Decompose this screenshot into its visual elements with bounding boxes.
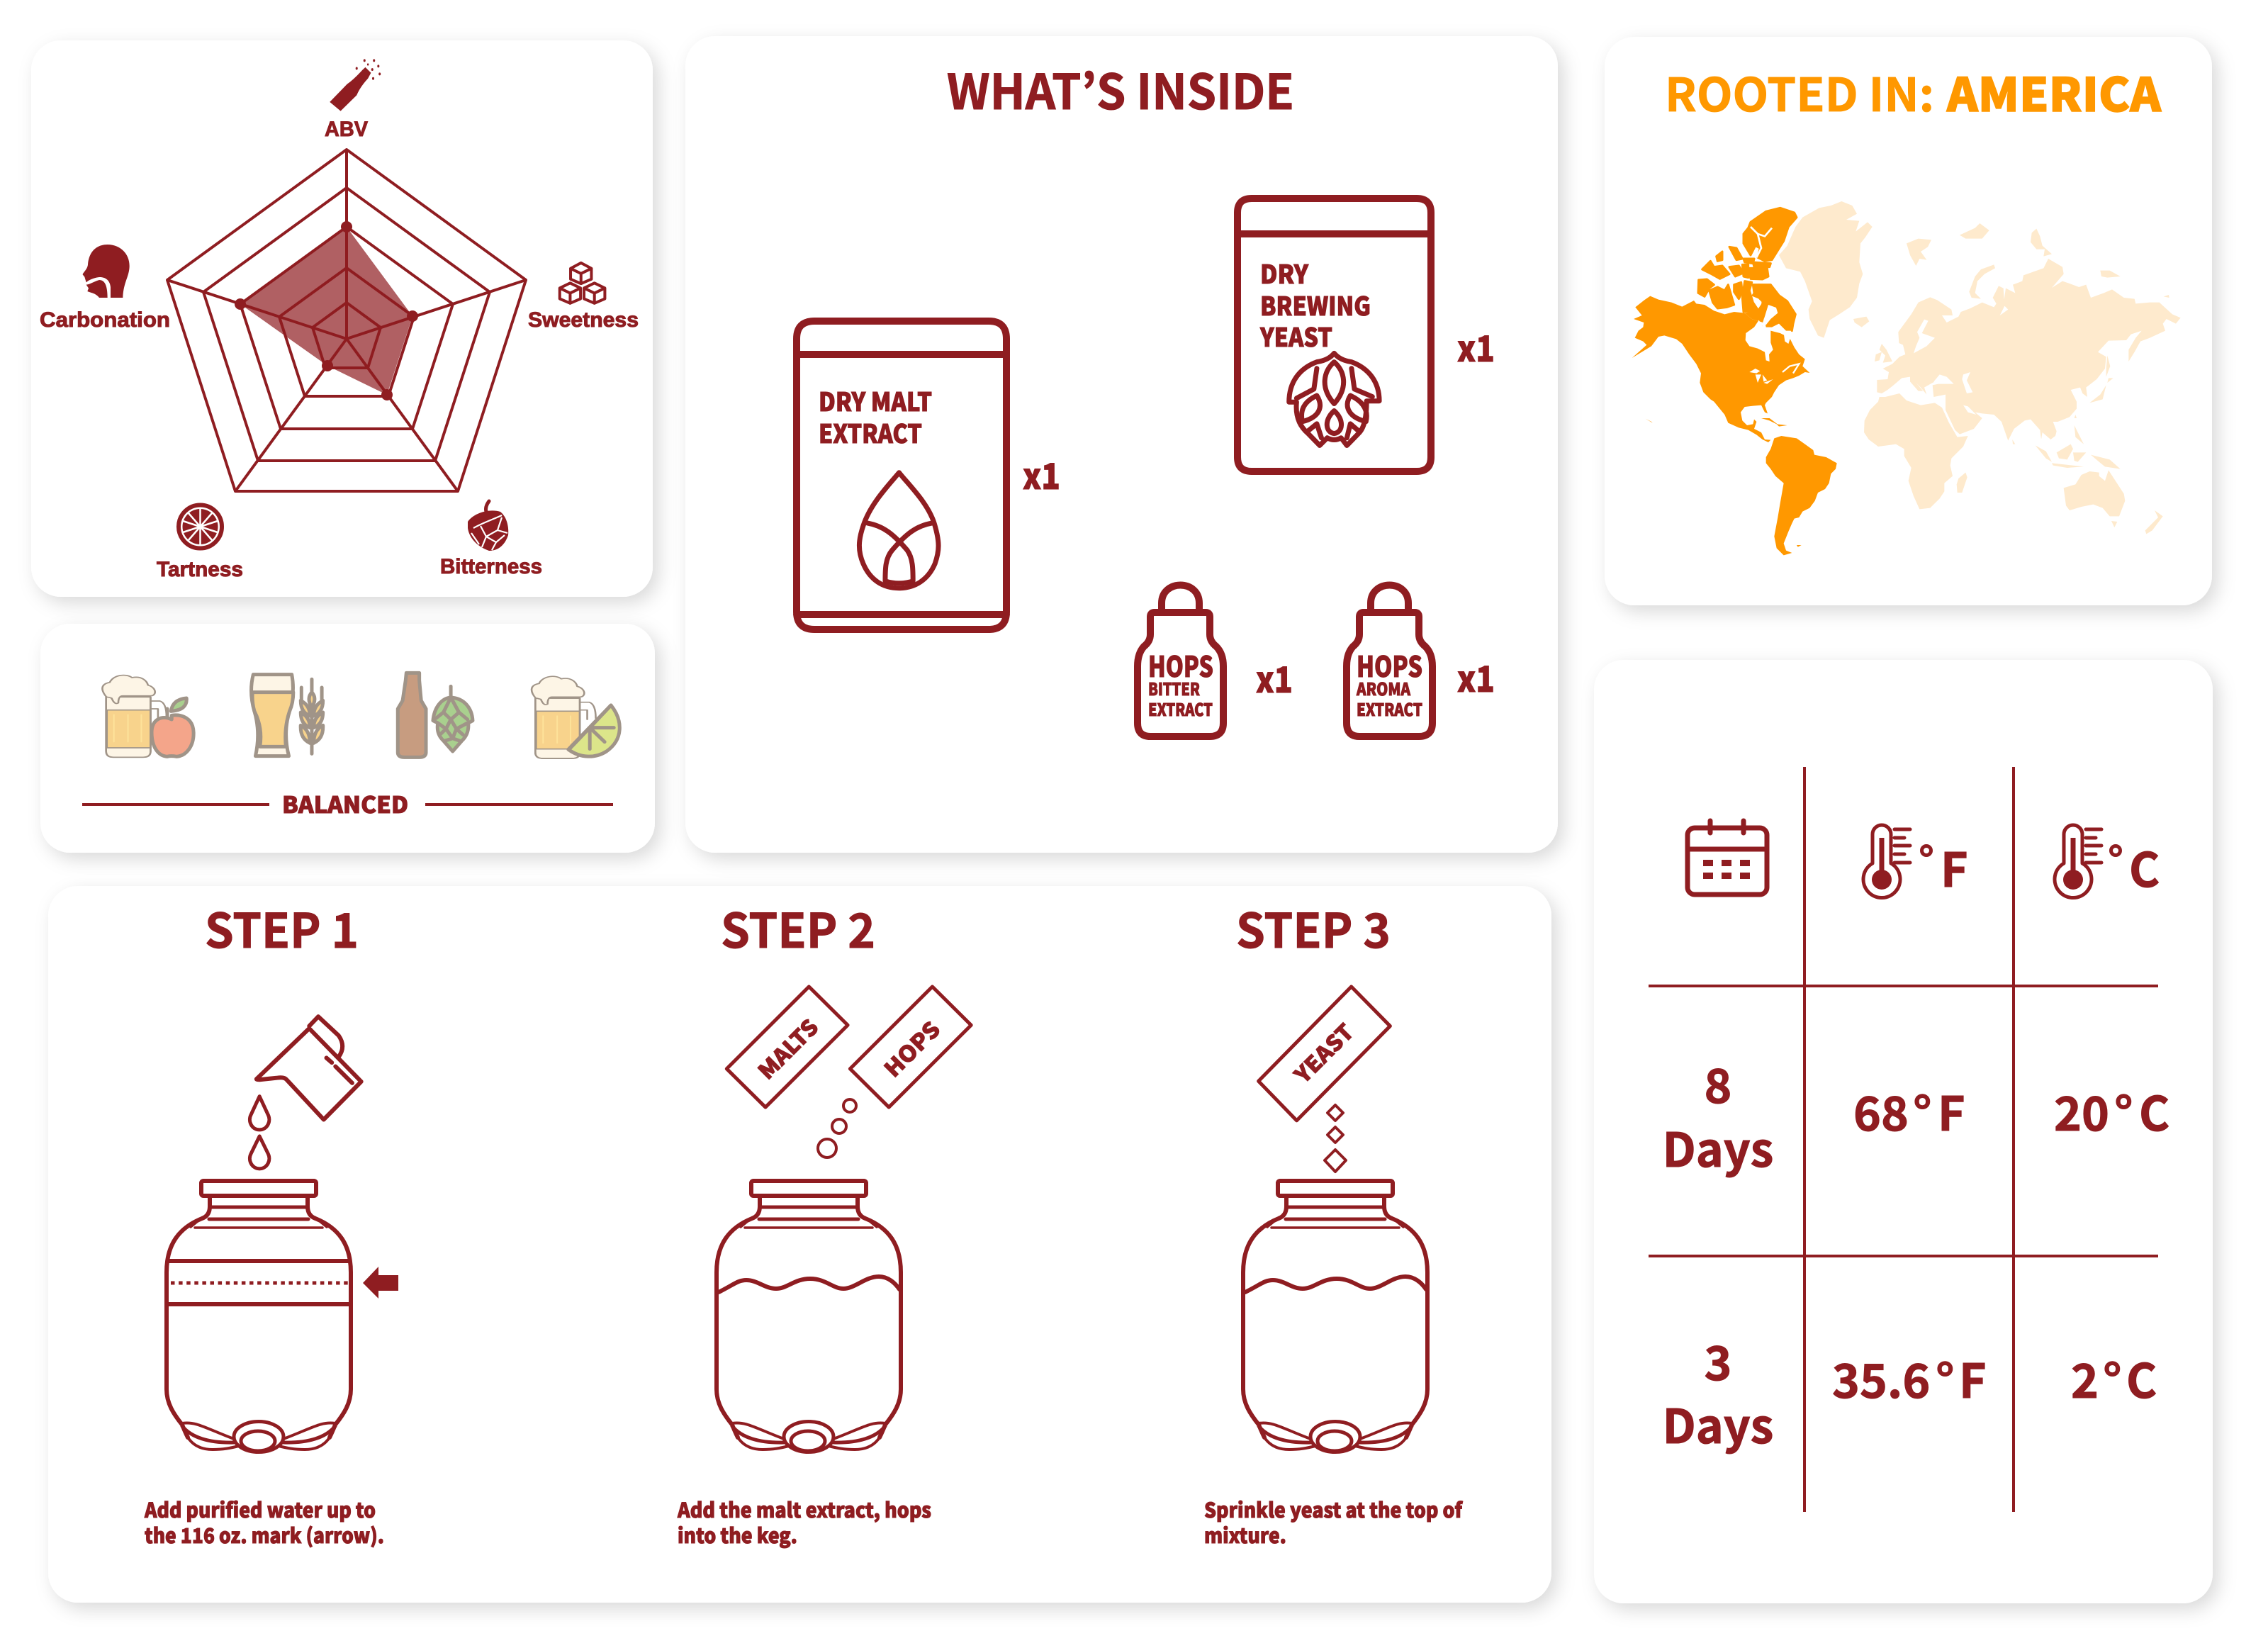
row: 3 days: 3	[1705, 1326, 1731, 1394]
icon: bubbles	[818, 1099, 856, 1157]
greenland	[1779, 201, 1873, 338]
heading: step 1: STEP 1	[205, 893, 359, 962]
panel: balanced style	[40, 624, 655, 853]
world map	[1632, 201, 2181, 555]
keg: step 2	[717, 1181, 901, 1452]
title: ROOTED IN:	[1665, 58, 1934, 125]
heading: balanced: BALANCED	[282, 787, 408, 820]
quantity x1 malt: x1	[1023, 449, 1060, 500]
text: step 2: into the keg.	[678, 1520, 797, 1549]
text: step 3	[1204, 1494, 1463, 1549]
row: 8 days: C	[2139, 1077, 2169, 1145]
row: 8 days: °	[2114, 1077, 2133, 1145]
divider line right	[425, 803, 613, 806]
icon: malts packet: MALTS	[750, 1011, 824, 1085]
icon: wheat beer glass	[252, 675, 323, 756]
icon: mug and apple	[102, 676, 193, 757]
row: 8 days: F	[1938, 1077, 1965, 1145]
bag: dry brewing yeast: DRY	[1260, 254, 1309, 291]
row: 3 days: F	[1959, 1344, 1987, 1412]
bottle: hops bitter extract: EXTRACT	[1148, 696, 1213, 721]
row: 3 days: °	[1936, 1344, 1955, 1412]
bag: dry malt extract: EXTRACT	[819, 414, 922, 451]
icon: thermometer fahrenheit: F	[1941, 833, 1968, 901]
bag: dry malt extract: DRY MALT	[819, 382, 932, 419]
rest of world	[1853, 223, 2181, 534]
inland seas	[1914, 320, 1976, 415]
row: 3 days: °	[2103, 1344, 2122, 1412]
text: step 2: Add the malt extract, hops	[677, 1494, 931, 1524]
row: 3 days	[1663, 1326, 2157, 1457]
icon: mug and lime	[532, 676, 619, 758]
bottle: hops bitter extract: HOPS	[1148, 644, 1213, 685]
text: step 2	[677, 1494, 931, 1549]
heading: step 2: STEP 2	[721, 893, 875, 962]
bag: dry malt extract	[797, 321, 1006, 629]
icon: yeast grains	[1325, 1105, 1346, 1172]
row: 3 days: C	[2126, 1344, 2157, 1412]
row: 8 days: 8	[1705, 1049, 1731, 1117]
arrow: fill level	[363, 1267, 398, 1299]
icon: thermometer celsius	[2055, 825, 2160, 901]
label: Bitterness: Bitterness	[440, 555, 542, 578]
icon: water drops	[249, 1097, 269, 1169]
row: 3 days: 35.6	[1832, 1344, 1930, 1412]
row: 8 days: 68	[1853, 1077, 1909, 1145]
row: 8 days: 20	[2054, 1077, 2109, 1145]
label: Carbonation: Carbonation	[40, 308, 170, 332]
icon: calendar	[1688, 821, 1767, 895]
text: step 3: mixture.	[1204, 1520, 1286, 1549]
hudson bay and lakes	[1746, 227, 1799, 384]
bottle: hops bitter extract	[1138, 585, 1223, 736]
icon: yeast packet: YEAST	[1286, 1015, 1359, 1089]
row: 3 days: 2	[2071, 1344, 2099, 1412]
panel: steps	[48, 886, 1551, 1603]
quantity x1 yeast: x1	[1457, 321, 1495, 372]
row: 8 days: °	[1913, 1077, 1932, 1145]
bottle: hops aroma extract: HOPS	[1357, 644, 1422, 685]
row: 3 days: Days	[1663, 1389, 1773, 1457]
icon: head and throat	[83, 245, 130, 298]
icon: hops packet: HOPS	[876, 1013, 946, 1083]
row: 8 days: Days	[1663, 1113, 1773, 1181]
icon: thermometer fahrenheit	[1863, 825, 1968, 901]
label: ABV: ABV	[325, 118, 368, 141]
panel: flavour radar	[31, 40, 653, 597]
panel: fermentation table	[1594, 660, 2213, 1603]
text: step 3: Sprinkle yeast at the top of	[1204, 1494, 1463, 1524]
icon: champagne bottle	[330, 59, 381, 111]
keg: step 3	[1243, 1181, 1427, 1452]
icon: malts packet	[726, 987, 848, 1107]
icon: bitter hop	[468, 501, 508, 551]
text: step 1: the 116 oz. mark (arrow).	[145, 1520, 384, 1549]
divider line left	[82, 803, 269, 806]
quantity x1 aroma: x1	[1457, 651, 1495, 702]
heading: step 3: STEP 3	[1236, 893, 1391, 962]
text: step 1: Add purified water up to	[144, 1494, 376, 1524]
label: Tartness: Tartness	[157, 558, 243, 581]
panel: what's inside	[685, 36, 1558, 853]
keg: step 1	[167, 1181, 351, 1452]
icon: hops packet	[850, 987, 971, 1107]
quantity x1 bitter: x1	[1256, 652, 1293, 703]
bottle: hops aroma extract	[1347, 585, 1432, 736]
icon: thermometer celsius: C	[2129, 833, 2160, 901]
label: Sweetness: Sweetness	[528, 308, 639, 332]
icon: bottle and hop	[398, 673, 473, 757]
bottle: hops aroma extract: AROMA	[1356, 676, 1411, 700]
icon: measuring jug	[257, 1016, 361, 1119]
bag: dry brewing yeast: YEAST	[1259, 318, 1332, 354]
radar chart	[167, 150, 526, 491]
panel: rooted in america	[1605, 37, 2212, 605]
icon: yeast packet	[1259, 987, 1390, 1121]
row: 8 days	[1663, 1049, 2169, 1181]
bottle: hops bitter extract: BITTER	[1148, 676, 1200, 700]
text: step 1	[144, 1494, 384, 1549]
title: WHAT’S INSIDE	[947, 53, 1294, 123]
bag: dry brewing yeast	[1237, 198, 1431, 471]
table grid	[1649, 767, 2158, 1512]
icon: citrus slice	[179, 505, 222, 549]
title emphasis: AMERICA	[1946, 58, 2162, 125]
americas	[1632, 208, 1837, 555]
icon: ice cubes	[560, 263, 605, 303]
bag: dry brewing yeast: BREWING	[1260, 286, 1371, 323]
bottle: hops aroma extract: EXTRACT	[1357, 696, 1422, 721]
